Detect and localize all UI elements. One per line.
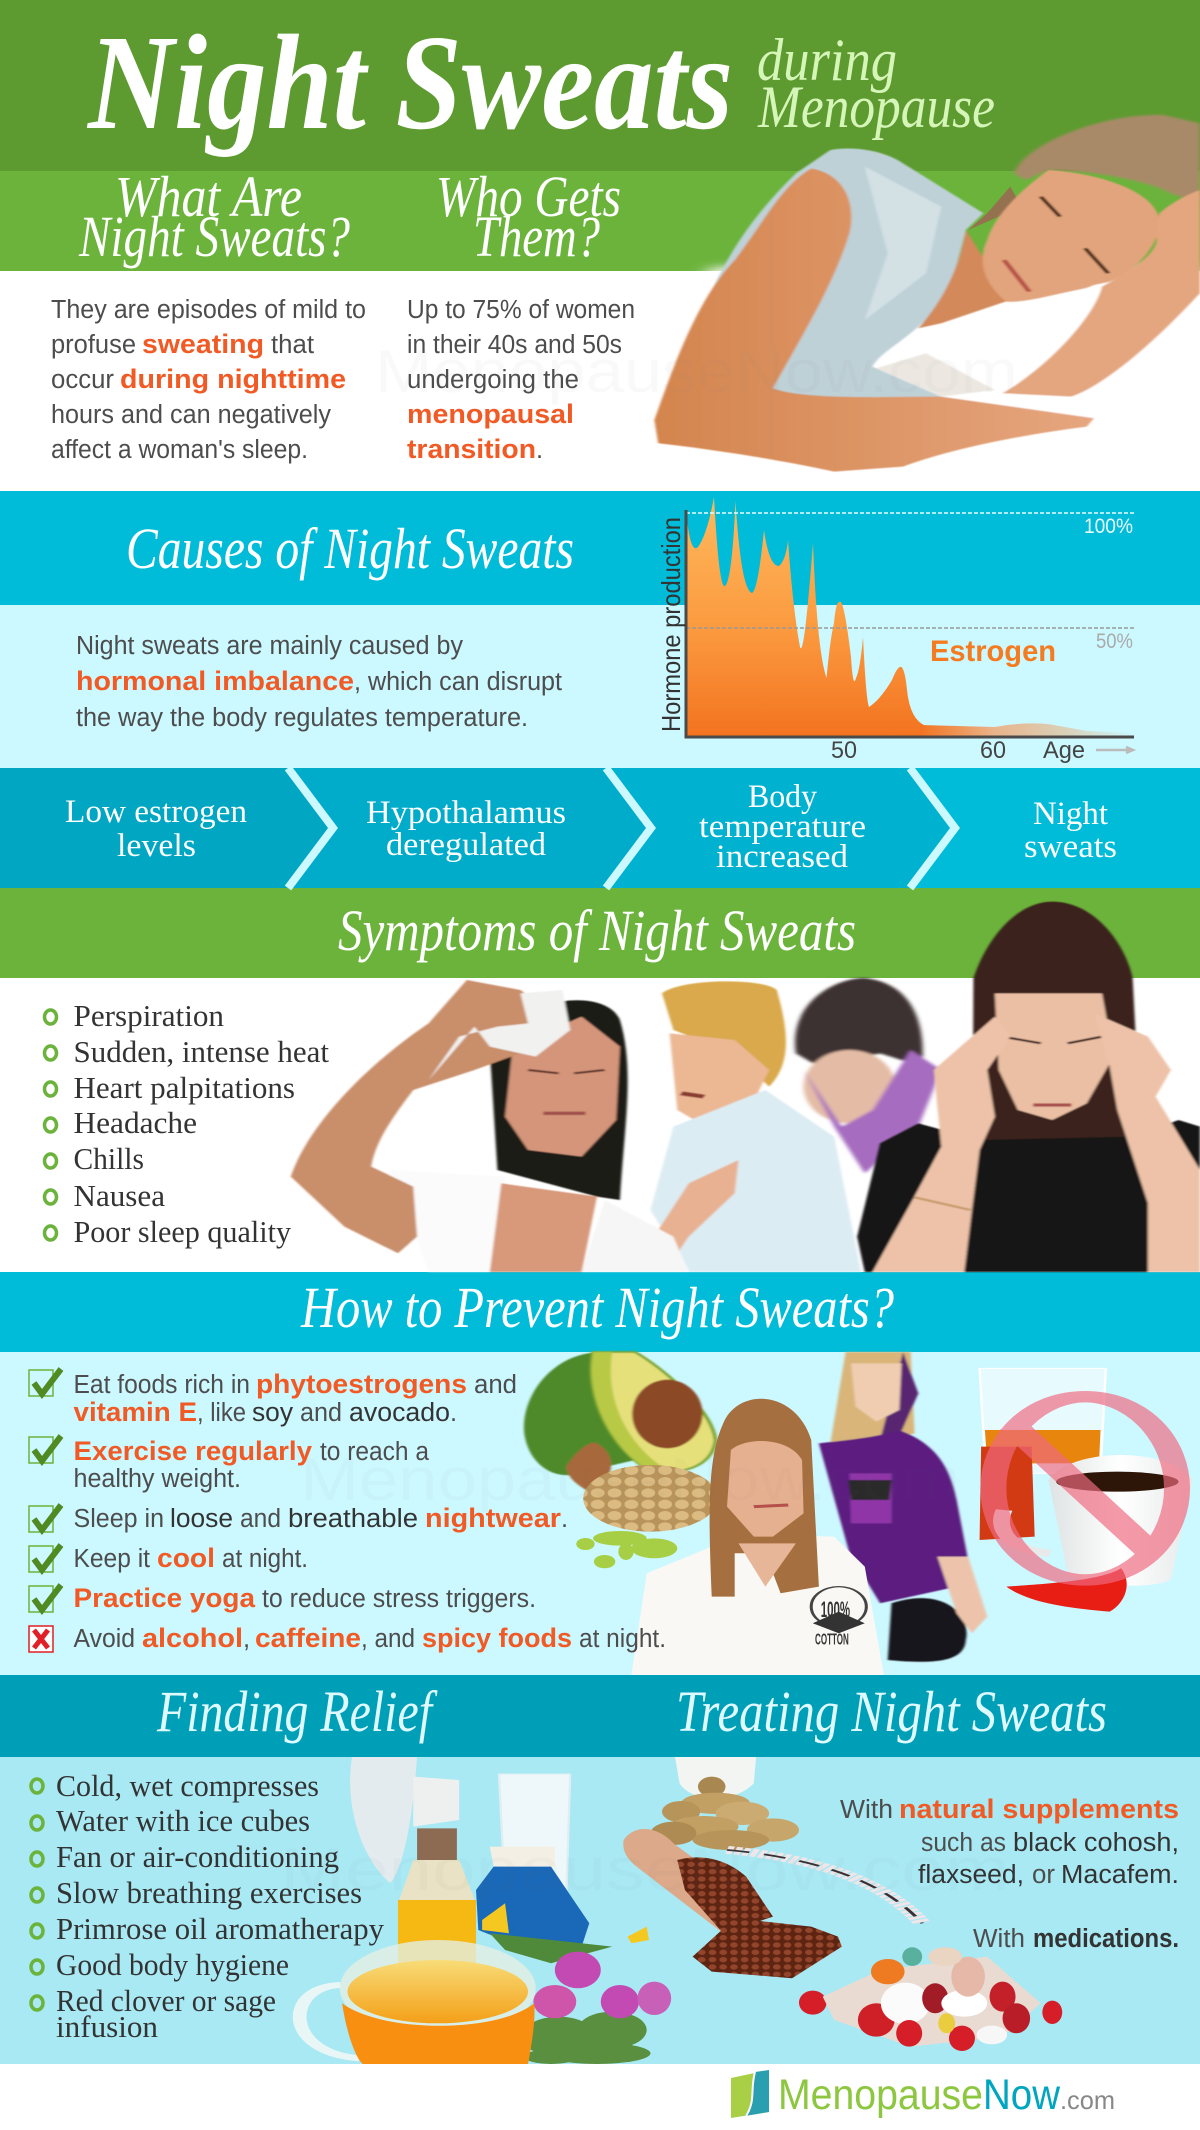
- logo: MenopauseNow.com: Now: [983, 2071, 1061, 2119]
- logo: MenopauseNow.com: .com: [1060, 2085, 1115, 2115]
- step: night sweats: Night: [1033, 796, 1108, 832]
- text: treatments: flaxseed,: [918, 1861, 1024, 1889]
- yoga woman: [819, 1352, 987, 1662]
- list: prevention: .: [561, 1505, 568, 1533]
- chart: estrogen decline: 60: [980, 737, 1006, 764]
- list: symptoms: Heart palpitations: [74, 1070, 295, 1105]
- red pepper: [1006, 1568, 1127, 1612]
- list: finding relief: Cold, wet compresses: [56, 1768, 319, 1803]
- list: prevention: vitamin E: [74, 1397, 197, 1427]
- list: symptoms: [44, 998, 329, 1249]
- step: hypothalamus: [288, 768, 651, 888]
- list: prevention: Keep it: [74, 1545, 150, 1573]
- list: symptoms: Poor sleep quality: [74, 1214, 291, 1249]
- woman 4 headache: [857, 902, 1200, 1272]
- chart: estrogen decline: 50%: [1096, 630, 1133, 653]
- chart: estrogen decline: 50: [831, 737, 857, 764]
- list: prevention: and: [240, 1505, 281, 1533]
- headings: finding relief and treating night sweats: Treating Night Sweats: [676, 1679, 1107, 1744]
- axes: [686, 510, 1134, 737]
- text: treatments: natural supplements: [899, 1794, 1179, 1824]
- icons: checkmarks: [29, 1369, 61, 1612]
- subtitle: [757, 27, 995, 140]
- list: symptoms: Headache: [74, 1105, 197, 1140]
- list: prevention: Exercise regularly: [74, 1436, 312, 1466]
- list: prevention: spicy foods: [422, 1623, 572, 1653]
- list: prevention: Eat foods rich in: [74, 1371, 250, 1399]
- title: Night Sweats: [86, 8, 733, 158]
- step: night sweats: [910, 768, 1200, 888]
- wooden scoop and flaxseed: [623, 1829, 842, 1978]
- towel: [429, 990, 570, 1080]
- list: finding relief: Fan or air-conditioning: [56, 1839, 339, 1874]
- pills: [799, 1947, 1062, 2051]
- primrose oil bottle: [398, 1828, 476, 1970]
- logo: MenopauseNow.com: [731, 2070, 1115, 2119]
- text: definition: that: [271, 331, 314, 359]
- list: finding relief: Red clover or sage: [56, 1983, 276, 2018]
- step: body temperature: temperature: [699, 809, 866, 845]
- step: low estrogen: Low estrogen: [65, 794, 247, 830]
- glass with ice: [499, 1774, 570, 1897]
- subtitle: during: [757, 27, 897, 93]
- list: prevention: [29, 1369, 666, 1653]
- watermark: MenopauseNow.com: [280, 1836, 1010, 1903]
- fan: [350, 1757, 459, 1883]
- list: prevention: healthy weight.: [74, 1465, 241, 1493]
- woman in white shirt: [631, 1399, 884, 1675]
- list: symptoms: Nausea: [74, 1178, 165, 1213]
- iced tea glass: [980, 1368, 1106, 1473]
- list: prevention: Avoid: [74, 1625, 135, 1653]
- text: who gets them: undergoing the: [407, 366, 579, 394]
- tablets: [651, 1777, 799, 1850]
- list: finding relief: Slow breathing exercises: [56, 1875, 362, 1910]
- text: definition: [51, 296, 366, 464]
- text: who gets them: in their 40s and 50s: [407, 331, 622, 359]
- list: finding relief: Good body hygiene: [56, 1947, 289, 1982]
- cotton badge: 100%: [821, 1597, 850, 1622]
- text: definition: during nighttime: [120, 364, 346, 394]
- leaves and flowers: [482, 1903, 671, 2064]
- step: hypothalamus: deregulated: [386, 827, 547, 863]
- tea cup: [300, 1940, 536, 2064]
- avocado: [524, 1352, 716, 1493]
- flow: causes chain: [0, 768, 1200, 888]
- text: treatments: black cohosh,: [1013, 1829, 1179, 1857]
- woman 2 blonde: [651, 981, 861, 1272]
- text: definition: sweating: [142, 329, 264, 359]
- step: body temperature: increased: [716, 839, 849, 875]
- arrow: age: [1096, 747, 1133, 753]
- icon: x mark: [29, 1626, 53, 1652]
- step: hypothalamus: Hypothalamus: [366, 795, 566, 831]
- step: low estrogen: [0, 768, 333, 888]
- heading: causes of night sweats: Causes of Night Sweats: [126, 516, 574, 581]
- icon: logo profile: [731, 2070, 769, 2118]
- list: prevention: , and: [361, 1625, 415, 1653]
- text: causes: hormonal imbalance: [76, 666, 354, 696]
- list: prevention: to reduce stress triggers.: [262, 1585, 536, 1613]
- list: prevention: loose: [170, 1505, 233, 1533]
- list: prevention: to reach a: [320, 1438, 430, 1466]
- heading: what are night sweats: [78, 164, 350, 269]
- chart: estrogen decline: Hormone production: [656, 517, 686, 732]
- heading: who gets them: [436, 164, 621, 269]
- heading: who gets them: Them?: [473, 204, 600, 269]
- list: finding relief: Primrose oil aromatherapy: [56, 1911, 384, 1946]
- headings: finding relief and treating night sweats: Finding Relief: [156, 1679, 438, 1744]
- list: prevention: avocado: [349, 1399, 450, 1427]
- heading: what are night sweats: Night Sweats?: [78, 204, 350, 269]
- woman 1 wiping forehead: [291, 980, 689, 1272]
- text: who gets them: Up to 75% of women: [407, 296, 635, 324]
- list: prevention: , like: [197, 1399, 246, 1427]
- text: definition: profuse: [51, 331, 136, 359]
- cohosh flower: [727, 1850, 922, 1923]
- list: prevention: soy: [252, 1399, 293, 1427]
- list: prevention: .: [450, 1399, 457, 1427]
- text: who gets them: transition: [407, 434, 536, 464]
- step: night sweats: sweats: [1024, 829, 1117, 865]
- chart: estrogen decline: 100%: [1084, 515, 1133, 538]
- list: symptoms: Chills: [74, 1141, 144, 1176]
- text: definition: They are episodes of mild to: [51, 296, 366, 324]
- text: treatments: medications.: [1033, 1925, 1179, 1953]
- step: body temperature: [606, 768, 955, 888]
- text: treatments: such as: [921, 1829, 1006, 1857]
- list: prevention: ,: [243, 1625, 250, 1653]
- text: causes: the way the body regulates temperature.: [76, 704, 528, 732]
- list: finding relief: [31, 1768, 384, 2044]
- logo: MenopauseNow.com: Menopause: [778, 2071, 983, 2119]
- woman 3 blurred: [795, 978, 941, 1173]
- text: treatments: With: [840, 1796, 893, 1824]
- list: prevention: and: [474, 1371, 517, 1399]
- list: prevention: phytoestrogens: [256, 1369, 467, 1399]
- text: definition: hours and can negatively: [51, 401, 331, 429]
- list: prevention: breathable: [288, 1505, 418, 1533]
- chart: estrogen decline: [656, 497, 1134, 764]
- list: prevention: caffeine: [255, 1623, 361, 1653]
- headings: finding relief and treating night sweats: [156, 1679, 1107, 1744]
- coffee mug: [1001, 1455, 1192, 1586]
- text: who gets them: [407, 296, 635, 464]
- supplement bottle: [675, 1757, 756, 1798]
- heading: who gets them: Who Gets: [436, 164, 621, 229]
- step: body temperature: Body: [748, 779, 817, 815]
- cotton badge: COTTON: [815, 1631, 849, 1648]
- chart: estrogen decline: Estrogen: [930, 635, 1056, 668]
- list: prevention: nightwear: [425, 1503, 562, 1533]
- text: definition: affect a woman's sleep.: [51, 436, 308, 464]
- cotton badge: [811, 1587, 866, 1648]
- heading: what are night sweats: What Are: [115, 164, 302, 229]
- text: definition: occur: [51, 366, 115, 394]
- watermark: MenopauseNow.com: [375, 338, 1018, 405]
- text: causes: [76, 632, 562, 732]
- text: causes: , which can disrupt: [354, 668, 562, 696]
- text: causes: Night sweats are mainly caused by: [76, 632, 463, 660]
- soybeans: [583, 1465, 718, 1532]
- list: prevention: at night.: [579, 1625, 666, 1653]
- illustration: prevention: [524, 1352, 1192, 1675]
- text: treatments: With: [973, 1925, 1025, 1953]
- text: who gets them: .: [536, 436, 543, 464]
- chili powder jar: [980, 1447, 1035, 1540]
- watermark: MenopauseNow.com: [300, 1446, 960, 1513]
- list: prevention: at night.: [222, 1545, 308, 1573]
- text: who gets them: menopausal: [407, 399, 574, 429]
- list: prevention: alcohol: [142, 1623, 243, 1653]
- text: treatments: Macafem.: [1061, 1861, 1179, 1889]
- estrogen area: [686, 497, 926, 737]
- list: prevention: Practice yoga: [74, 1583, 256, 1613]
- list: symptoms: Perspiration: [74, 998, 224, 1033]
- heading: symptoms: Symptoms of Night Sweats: [338, 898, 856, 963]
- heading: how to prevent: How to Prevent Night Sweats?: [300, 1275, 894, 1340]
- text: treatments: or: [1032, 1861, 1056, 1889]
- illustration: relief items: [300, 1757, 1062, 2064]
- edamame: [576, 1531, 677, 1568]
- photo: woman sleeping on a pillow: [651, 115, 1200, 491]
- list: prevention: cool: [157, 1543, 215, 1573]
- blue ice bag: [476, 1847, 589, 1947]
- list: finding relief: Water with ice cubes: [56, 1803, 310, 1838]
- no symbol: [993, 1397, 1177, 1580]
- list: symptoms: Sudden, intense heat: [74, 1034, 329, 1069]
- subtitle: Menopause: [757, 74, 995, 140]
- estrogen tail: [920, 723, 1133, 737]
- list: finding relief: infusion: [56, 2009, 158, 2044]
- list: prevention: and: [300, 1399, 342, 1427]
- text: treatments: [840, 1794, 1179, 1953]
- photo: women with symptoms: [291, 902, 1200, 1272]
- list: prevention: Sleep in: [74, 1505, 164, 1533]
- chart: estrogen decline: Age: [1043, 737, 1085, 764]
- step: low estrogen: levels: [117, 828, 196, 864]
